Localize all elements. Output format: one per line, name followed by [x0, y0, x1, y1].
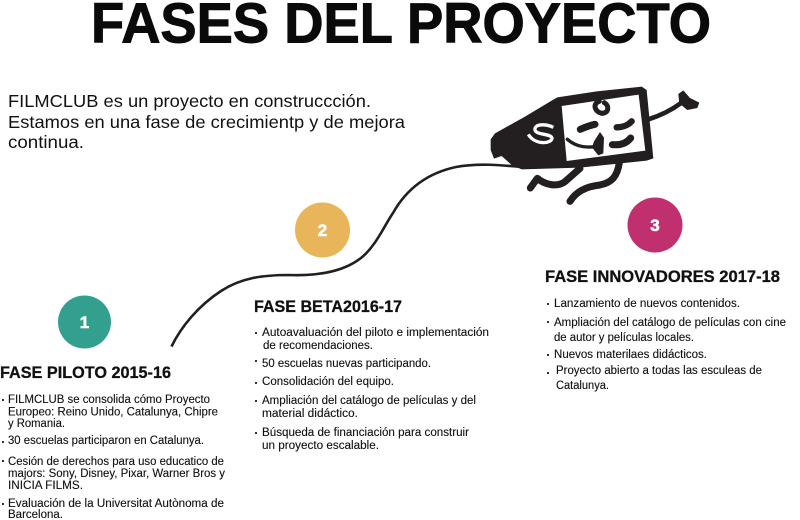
list phase 2: Autoavaluación del piloto e implementación [262, 327, 489, 339]
badge 3 [628, 198, 682, 252]
badge 1: 1 [80, 313, 89, 332]
list phase 1: Cesión de derechos para uso educatico de [8, 456, 224, 468]
list phase 2: Búsqueda de financiación para construir [262, 427, 469, 439]
list phase 2: material didáctico. [262, 408, 358, 420]
heading phase 2: FASE BETA2016-17 [254, 297, 402, 316]
mascot arm [648, 103, 682, 119]
list phase 1: 30 escuelas participaron en Catalunya. [8, 435, 204, 447]
list phase 3: Lanzamiento de nuevos contenidos. [554, 298, 740, 310]
mascot screen [562, 95, 645, 161]
intro text block: continua. [8, 132, 84, 152]
list phase 1: majors: Sony, Disney, Pixar, Warner Bros y [8, 468, 225, 480]
list phase 2: 50 escuelas nuevas participando. [262, 358, 431, 370]
list phase 1: INICIA FILMS. [8, 480, 83, 492]
badge 3: 3 [650, 216, 660, 235]
mascot face [567, 101, 632, 147]
mascot body [491, 87, 653, 169]
intro text block [8, 91, 405, 152]
winding path line [172, 165, 522, 346]
mascot nose [592, 132, 604, 155]
list phase 3: de autor y películas locales. [554, 332, 694, 344]
mascot S logo [528, 125, 553, 143]
list phase 3 [547, 298, 786, 392]
list phase 3: Proyecto abierto a todas las esculeas de [556, 365, 762, 377]
list phase 2: un proyecto escalable. [262, 440, 379, 452]
list phase 1 [2, 394, 225, 520]
phase 1 [0, 296, 225, 520]
list phase 3: Ampliación del catálogo de películas con cine [554, 317, 786, 329]
heading phase 3: FASE INNOVADORES 2017-18 [545, 267, 780, 286]
heading phase 1: FASE PILOTO 2015-16 [0, 363, 171, 382]
intro text block: FILMCLUB es un proyecto en construccción. [8, 91, 371, 111]
list phase 2: de recomendaciones. [263, 340, 373, 352]
mascot: flying film slate character [491, 87, 699, 201]
list phase 2: Ampliación del catálogo de películas y del [262, 395, 476, 407]
phase 2 [254, 202, 489, 452]
list phase 1: FILMCLUB se consolida cómo Proyecto [8, 394, 210, 406]
list phase 1: Evaluación de la Universitat Autònoma de [8, 498, 224, 510]
mascot hand [678, 90, 699, 110]
list phase 3: Catalunya. [556, 380, 609, 392]
list phase 2: Consolidación del equipo. [262, 376, 394, 388]
badge 1 [58, 296, 111, 348]
list phase 3: Nuevos materilaes didácticos. [554, 349, 707, 361]
badge 2: 2 [318, 221, 327, 240]
mascot legs [530, 163, 619, 201]
badge 2 [295, 202, 350, 258]
phase 3 [545, 198, 786, 392]
list phase 1: y Romania. [8, 418, 65, 430]
intro text block: Estamos en una fase de crecimientp y de mejora [8, 112, 405, 132]
list phase 2 [255, 327, 489, 452]
list phase 1: Europeo: Reino Unido, Catalunya, Chipre [8, 406, 218, 418]
